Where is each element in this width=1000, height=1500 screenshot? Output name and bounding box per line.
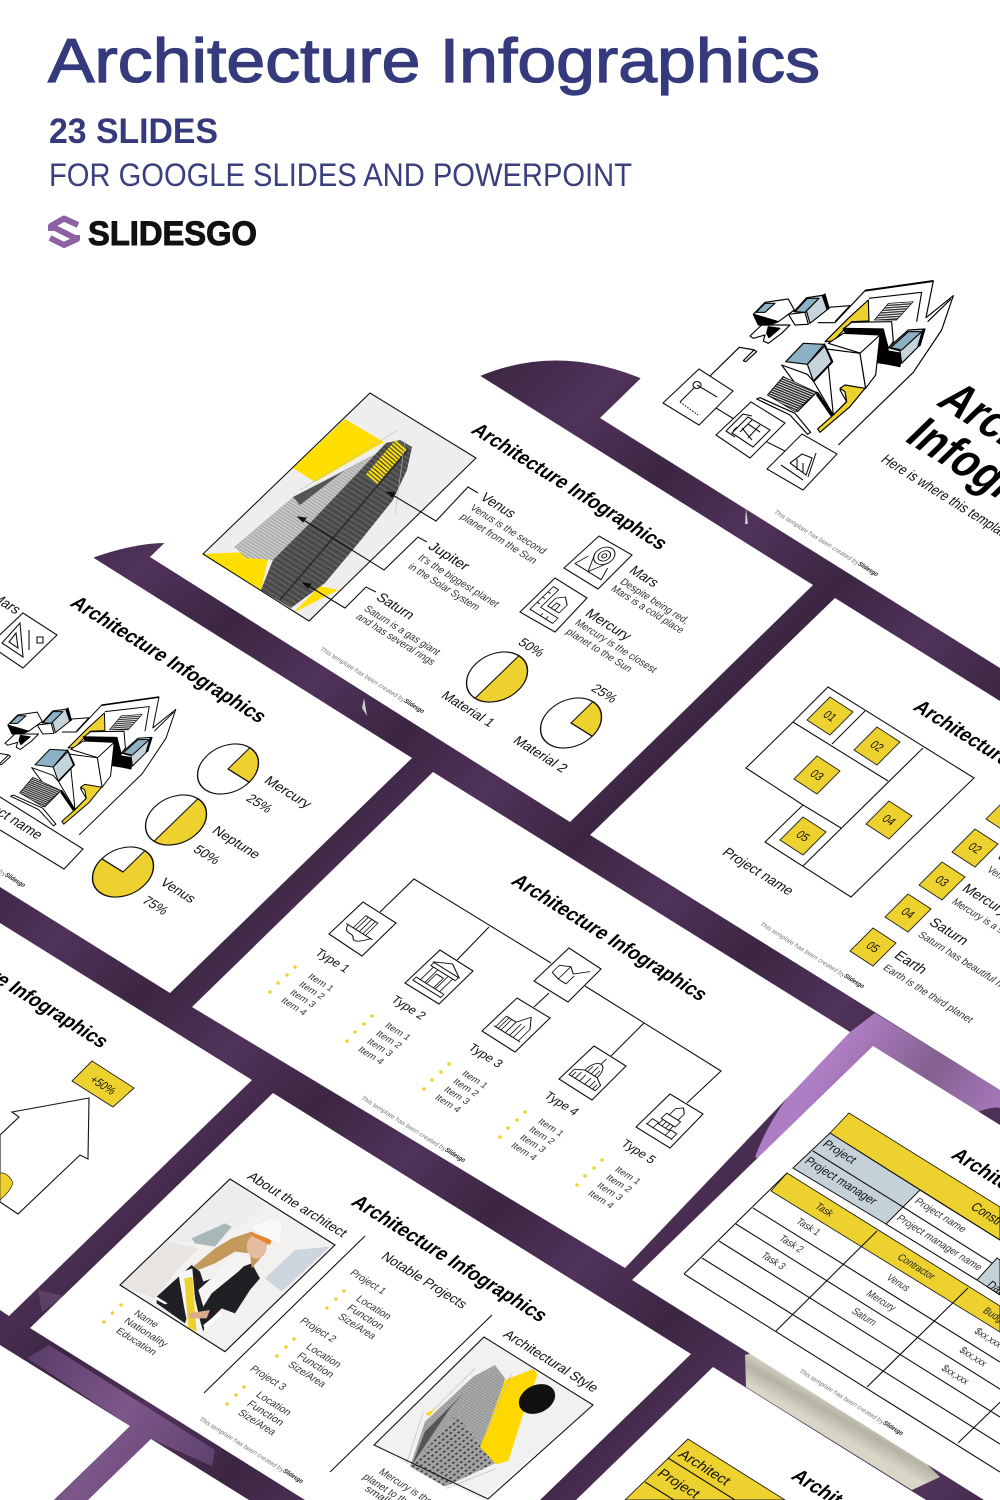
footer credit: This template has been created by: [197, 1417, 285, 1473]
dividers: [204, 1236, 492, 1472]
project list 3: Location: [253, 1390, 294, 1418]
callout: Jupiter: It's the biggest planet: [415, 553, 502, 610]
icon box: floor plan: [716, 402, 785, 458]
block: Type 3: Item 4: [433, 1092, 464, 1114]
slide title: Architecture Infographics: [346, 1192, 552, 1326]
arrow: [0, 1098, 89, 1214]
icon box: drawing tools: [0, 613, 57, 668]
text: Mars: Despite being red,: [617, 577, 692, 626]
floor plan diagram: 02: [867, 739, 886, 754]
project info table: [793, 1113, 1000, 1300]
task table: $xx,xxx: [956, 1345, 990, 1369]
illustration: isometric building: [0, 697, 176, 835]
callout: Jupiter: in the Solar System: [405, 562, 482, 613]
footer credit: Slidesgo: [856, 561, 880, 578]
footer credit: This template has been created by: [359, 1096, 447, 1152]
block: Type 4: Item 2: [527, 1124, 558, 1146]
panel: about the architect slide: [30, 1093, 691, 1500]
logo: Slidesgo: SLIDESGO: [88, 215, 257, 253]
callout: Saturn: Saturn is a gas giant: [361, 604, 443, 658]
project list 3: Function: [244, 1399, 286, 1428]
callout: Saturn: [303, 583, 443, 668]
legend list: [850, 796, 1000, 1026]
callout: Venus: Venus is the second: [467, 503, 549, 557]
footer credit: [359, 1096, 467, 1164]
footer credit: [772, 510, 880, 578]
list: architect details: Education: [114, 1326, 159, 1357]
tree connectors: [380, 879, 721, 1103]
footer credit: Slidesgo: [402, 698, 426, 715]
text: Mars: [608, 563, 692, 636]
callout: Saturn: and has several rings: [353, 612, 438, 668]
photo: tower with yellow shape: [374, 1337, 593, 1500]
text: Mercury: planet to the Sun: [563, 627, 635, 675]
legend list: Earth: [891, 948, 931, 977]
pie chart: Neptune: 50%: [190, 842, 224, 867]
block: Type 3: [422, 1042, 505, 1114]
project list 1: Location: [353, 1294, 394, 1322]
panel: architect table slide: [576, 1367, 992, 1500]
project list 1: Project 1: [347, 1268, 389, 1297]
footer credit: This template has been created by: [772, 510, 860, 566]
pie chart: Venus: 75%: [139, 893, 172, 918]
pie chart: Mercury: 25%: [243, 791, 276, 816]
icon box: map pin: [564, 536, 632, 589]
purple backdrop: [0, 360, 1000, 1500]
panel: project pies slide: [0, 499, 412, 993]
task table: Saturn: [849, 1306, 879, 1328]
icon box: ruler house: [520, 578, 587, 632]
callout: Venus: planet from the Sun: [457, 512, 540, 566]
icon box: temple: [405, 950, 473, 1004]
footer credit: Slidesgo: [881, 1420, 905, 1437]
block: Type 3: Item 3: [442, 1084, 473, 1106]
footer credit: Slidesgo: [443, 1147, 467, 1164]
block: Type 5: Item 1: [613, 1164, 644, 1186]
project list 2: Function: [294, 1351, 336, 1380]
icon box: civic building: [636, 1094, 703, 1148]
footer credit: Slidesgo: [3, 872, 27, 889]
block: Type 5: Item 3: [595, 1180, 626, 1202]
legend list: Earth is the third planet: [880, 963, 976, 1026]
block: Type 4: Item 4: [509, 1140, 540, 1162]
block: Type 4: Item 3: [518, 1132, 549, 1154]
block: Type 1: Type 1: [312, 947, 352, 975]
block: Type 3: Item 2: [451, 1076, 482, 1098]
block: Type 1: Item 1: [306, 971, 337, 993]
footer credit: This template has been created by: [318, 647, 406, 703]
callout: +50%: +50%: [86, 1074, 118, 1097]
callout: Venus: [387, 487, 549, 566]
legend list: Saturn: [926, 915, 973, 948]
callout: +50%: [72, 1061, 134, 1107]
block: Type 3: Item 1: [460, 1068, 491, 1090]
pie chart: Neptune: [133, 786, 264, 867]
text: Mercury: Mercury: [582, 606, 636, 643]
floor plan diagram: 04: [879, 813, 898, 829]
block: Type 4: Item 1: [536, 1116, 567, 1138]
text: Mercury: [563, 606, 660, 675]
block: Type 5: Type 5: [618, 1138, 658, 1166]
legend list: 03: [932, 874, 951, 889]
project name box: [0, 789, 83, 869]
icon box: drafting compass: [663, 369, 733, 425]
footer credit: Slidesgo: [281, 1468, 305, 1485]
pie chart: Mercury: Mercury: [261, 773, 316, 811]
icon box: capitol: [559, 1046, 626, 1100]
footer credit: Slidesgo: [842, 973, 866, 990]
block: Type 2: Item 1: [383, 1020, 414, 1042]
project info table: Project manager: [801, 1155, 880, 1208]
project info table: Project name: [911, 1196, 969, 1235]
footer credit: [797, 1369, 905, 1437]
floor plan diagram: 05: [793, 829, 812, 844]
panel: project table slide: [632, 1046, 1000, 1500]
block: Type 4: Type 4: [541, 1090, 582, 1119]
floor plan diagram: 01: [820, 709, 839, 724]
subtitle: slide count: 23 SLIDES: [49, 112, 218, 151]
slide title: Architecture Infographics: [466, 420, 672, 554]
pie chart: Venus: [80, 838, 199, 918]
icon box: root crane: [534, 948, 601, 1002]
project list 2: Location: [303, 1342, 344, 1370]
project list 2: [275, 1316, 344, 1390]
task table: [684, 1173, 1000, 1472]
heading: notable projects: Notable Projects: [378, 1249, 471, 1311]
pie chart: Material 1: 50%: [515, 635, 548, 660]
heading: about the architect: About the architect: [244, 1169, 351, 1240]
block: Type 2: Item 3: [365, 1036, 396, 1058]
pie chart: Material 2: [510, 681, 621, 775]
block: Type 1: Item 2: [297, 979, 328, 1001]
photo: skyscraper: [203, 393, 476, 621]
block: Type 4: [498, 1090, 582, 1162]
panel: building types tree slide: [192, 772, 850, 1268]
project info table: Project: [819, 1138, 860, 1167]
icon box: house plan: [767, 434, 837, 490]
heading: architectural style: Architectural Style: [500, 1327, 602, 1395]
task table: Task 3: [758, 1250, 788, 1272]
project info table: Project manager name: [893, 1213, 985, 1273]
yellow blob: [0, 1173, 13, 1200]
main title: Architecture Infographics: [48, 27, 820, 96]
task table: Contractor: [894, 1252, 938, 1283]
legend list: 04: [898, 906, 917, 922]
block: Type 5: Item 4: [586, 1188, 617, 1210]
callout: Jupiter: Jupiter: [425, 539, 474, 574]
pie chart: Material 2: Material 2: [510, 733, 571, 775]
yellow table: [625, 1439, 785, 1500]
block: Type 5: [575, 1138, 658, 1210]
block: Type 1: [268, 947, 352, 1017]
list: architect details: [102, 1303, 171, 1357]
panel: bottom left slide: [0, 1345, 130, 1500]
block: Type 3: Type 3: [465, 1042, 505, 1070]
connector: [716, 408, 785, 451]
panel: bottom slide: [88, 1439, 249, 1500]
pie chart: Venus: Venus: [157, 875, 199, 906]
footer credit: This template has been created by: [758, 922, 846, 978]
project list 2: Size/Area: [285, 1360, 329, 1390]
subtitle: platforms: FOR GOOGLE SLIDES AND POWERPOINT: [49, 157, 632, 193]
task table: Task 2: [776, 1233, 806, 1255]
project list 3: Project 3: [247, 1364, 289, 1393]
project list 1: [325, 1268, 394, 1342]
callout: Jupiter: [298, 517, 502, 613]
block: Type 5: Item 2: [604, 1172, 635, 1194]
floor plan diagram: 03: [807, 768, 826, 783]
footer credit: [318, 647, 426, 715]
task table: Task 1: [793, 1216, 823, 1238]
footer credit: [758, 922, 866, 990]
illustration: isometric building: [710, 281, 953, 445]
task table: Venus: [883, 1273, 913, 1294]
panel: floor plan slide: [590, 598, 1000, 1090]
panel: slide with photo and materials: [150, 321, 813, 822]
icon box: house: [482, 998, 550, 1052]
panel: growth arrow slide: [0, 918, 252, 1316]
panel: title slide: [600, 181, 1000, 668]
text: Mars: Mars is a cold place: [608, 584, 687, 636]
floor plan diagram: [746, 687, 974, 897]
photo: architect: [120, 1179, 335, 1352]
project list 1: Function: [344, 1303, 386, 1332]
block: Type 2: Type 2: [388, 994, 428, 1022]
callout: Venus: Venus: [477, 490, 520, 521]
text: Mercury: Mercury is the closest: [572, 618, 660, 675]
list: architect details: Name: [132, 1308, 161, 1329]
yellow table: Project: [654, 1466, 704, 1500]
slide title: Architecture Infographics: [65, 593, 271, 727]
block: Type 2: Item 4: [356, 1044, 387, 1066]
task table: $xx,xxx: [938, 1363, 972, 1387]
pie chart: Mercury: [185, 735, 316, 816]
footer credit: This template has been created by: [797, 1369, 885, 1425]
project list 3: Size/Area: [235, 1408, 279, 1438]
icon box: bridge: [329, 902, 396, 956]
block: Type 2: [345, 994, 428, 1066]
callout: Saturn: Saturn: [373, 590, 419, 622]
pie chart: Material 1: [438, 635, 548, 730]
text: Mars: Mars: [626, 563, 663, 590]
block: Type 1: Item 4: [279, 995, 310, 1017]
project list 1: Size/Area: [335, 1312, 379, 1342]
pie chart: Material 2: 25%: [588, 681, 621, 706]
block: Type 2: Item 2: [374, 1028, 405, 1050]
task table: Task: [812, 1201, 836, 1219]
yellow table: Architect: [675, 1447, 735, 1488]
slide title: Architecture Infographics: [506, 871, 712, 1005]
project list 2: Project 2: [297, 1316, 339, 1345]
legend list: 05: [863, 940, 882, 955]
project list 3: [225, 1364, 294, 1438]
legend list: 02: [965, 841, 984, 856]
pie chart: Neptune: Neptune: [209, 823, 264, 862]
pie chart: Material 1: Material 1: [438, 688, 498, 730]
list: architect details: Nationality: [122, 1316, 171, 1349]
footer credit: [197, 1417, 305, 1485]
block: Type 1: Item 3: [288, 987, 319, 1009]
label: project name: Project name: [719, 845, 798, 898]
task table: Mercury: [863, 1289, 899, 1314]
